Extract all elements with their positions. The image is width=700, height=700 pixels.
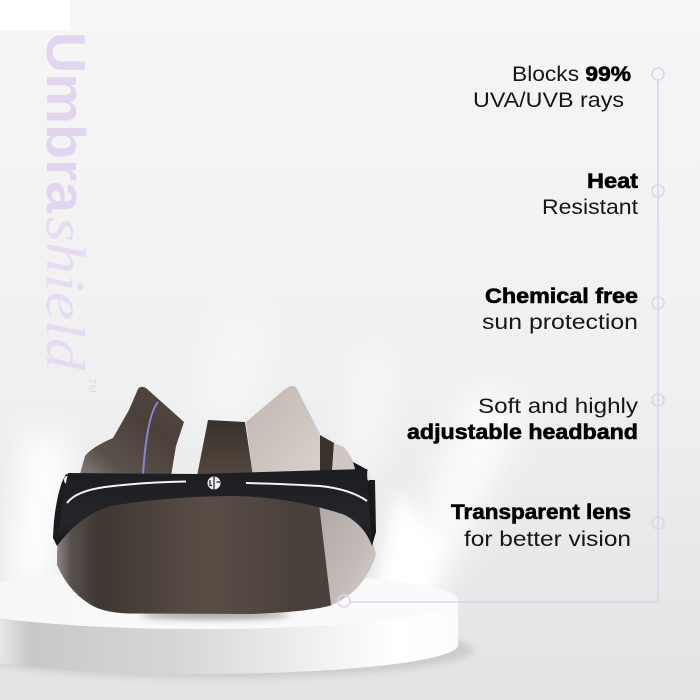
timeline end node [338,595,350,607]
white spot on strap [64,476,70,484]
feature: transparent lens [451,501,631,551]
lilac edge highlight [367,470,372,481]
lens right highlight [319,504,376,605]
feature: transparent lens: Transparent lens [451,501,631,524]
headband logo [208,476,220,490]
feature: transparent lens: for better vision [464,528,631,551]
shadow under visor [140,611,290,619]
feature: blocks 99%: Blocks 99% [512,63,631,86]
center fin [197,420,253,476]
trademark: TM [86,378,97,393]
purple reflection [143,402,158,474]
feature: blocks 99% [473,63,631,112]
feature: blocks 99%: UVA/UVB rays [473,89,624,112]
left fin [80,387,184,476]
feature: heat resistant: Heat [587,170,638,193]
feature: chemical free: Chemical free [485,285,638,308]
headband white stripe right [246,483,367,501]
headband [57,469,372,546]
brand name vertical [35,32,97,371]
rear light panel [332,443,357,472]
right fin [246,386,320,476]
feature: chemical free [482,285,638,334]
visor product [53,386,376,619]
headband white stripe left [67,482,186,503]
white corner patch [0,0,70,30]
feature: adjustable headband [407,395,639,444]
feature: adjustable headband: adjustable headband [407,421,638,444]
timeline connector [350,68,664,602]
feature: chemical free: sun protection [482,311,638,334]
light rays behind product [5,310,530,605]
lens [57,488,332,614]
plinth [0,571,473,678]
left strap tail [53,474,80,546]
side strap [353,462,376,546]
rear strap [320,435,334,474]
feature: heat resistant: Resistant [542,196,638,219]
brand name vertical: shield [35,217,96,371]
brand name vertical: Umbra [35,32,97,213]
feature: adjustable headband: Soft and highly [478,395,639,418]
feature: heat resistant [542,170,638,219]
